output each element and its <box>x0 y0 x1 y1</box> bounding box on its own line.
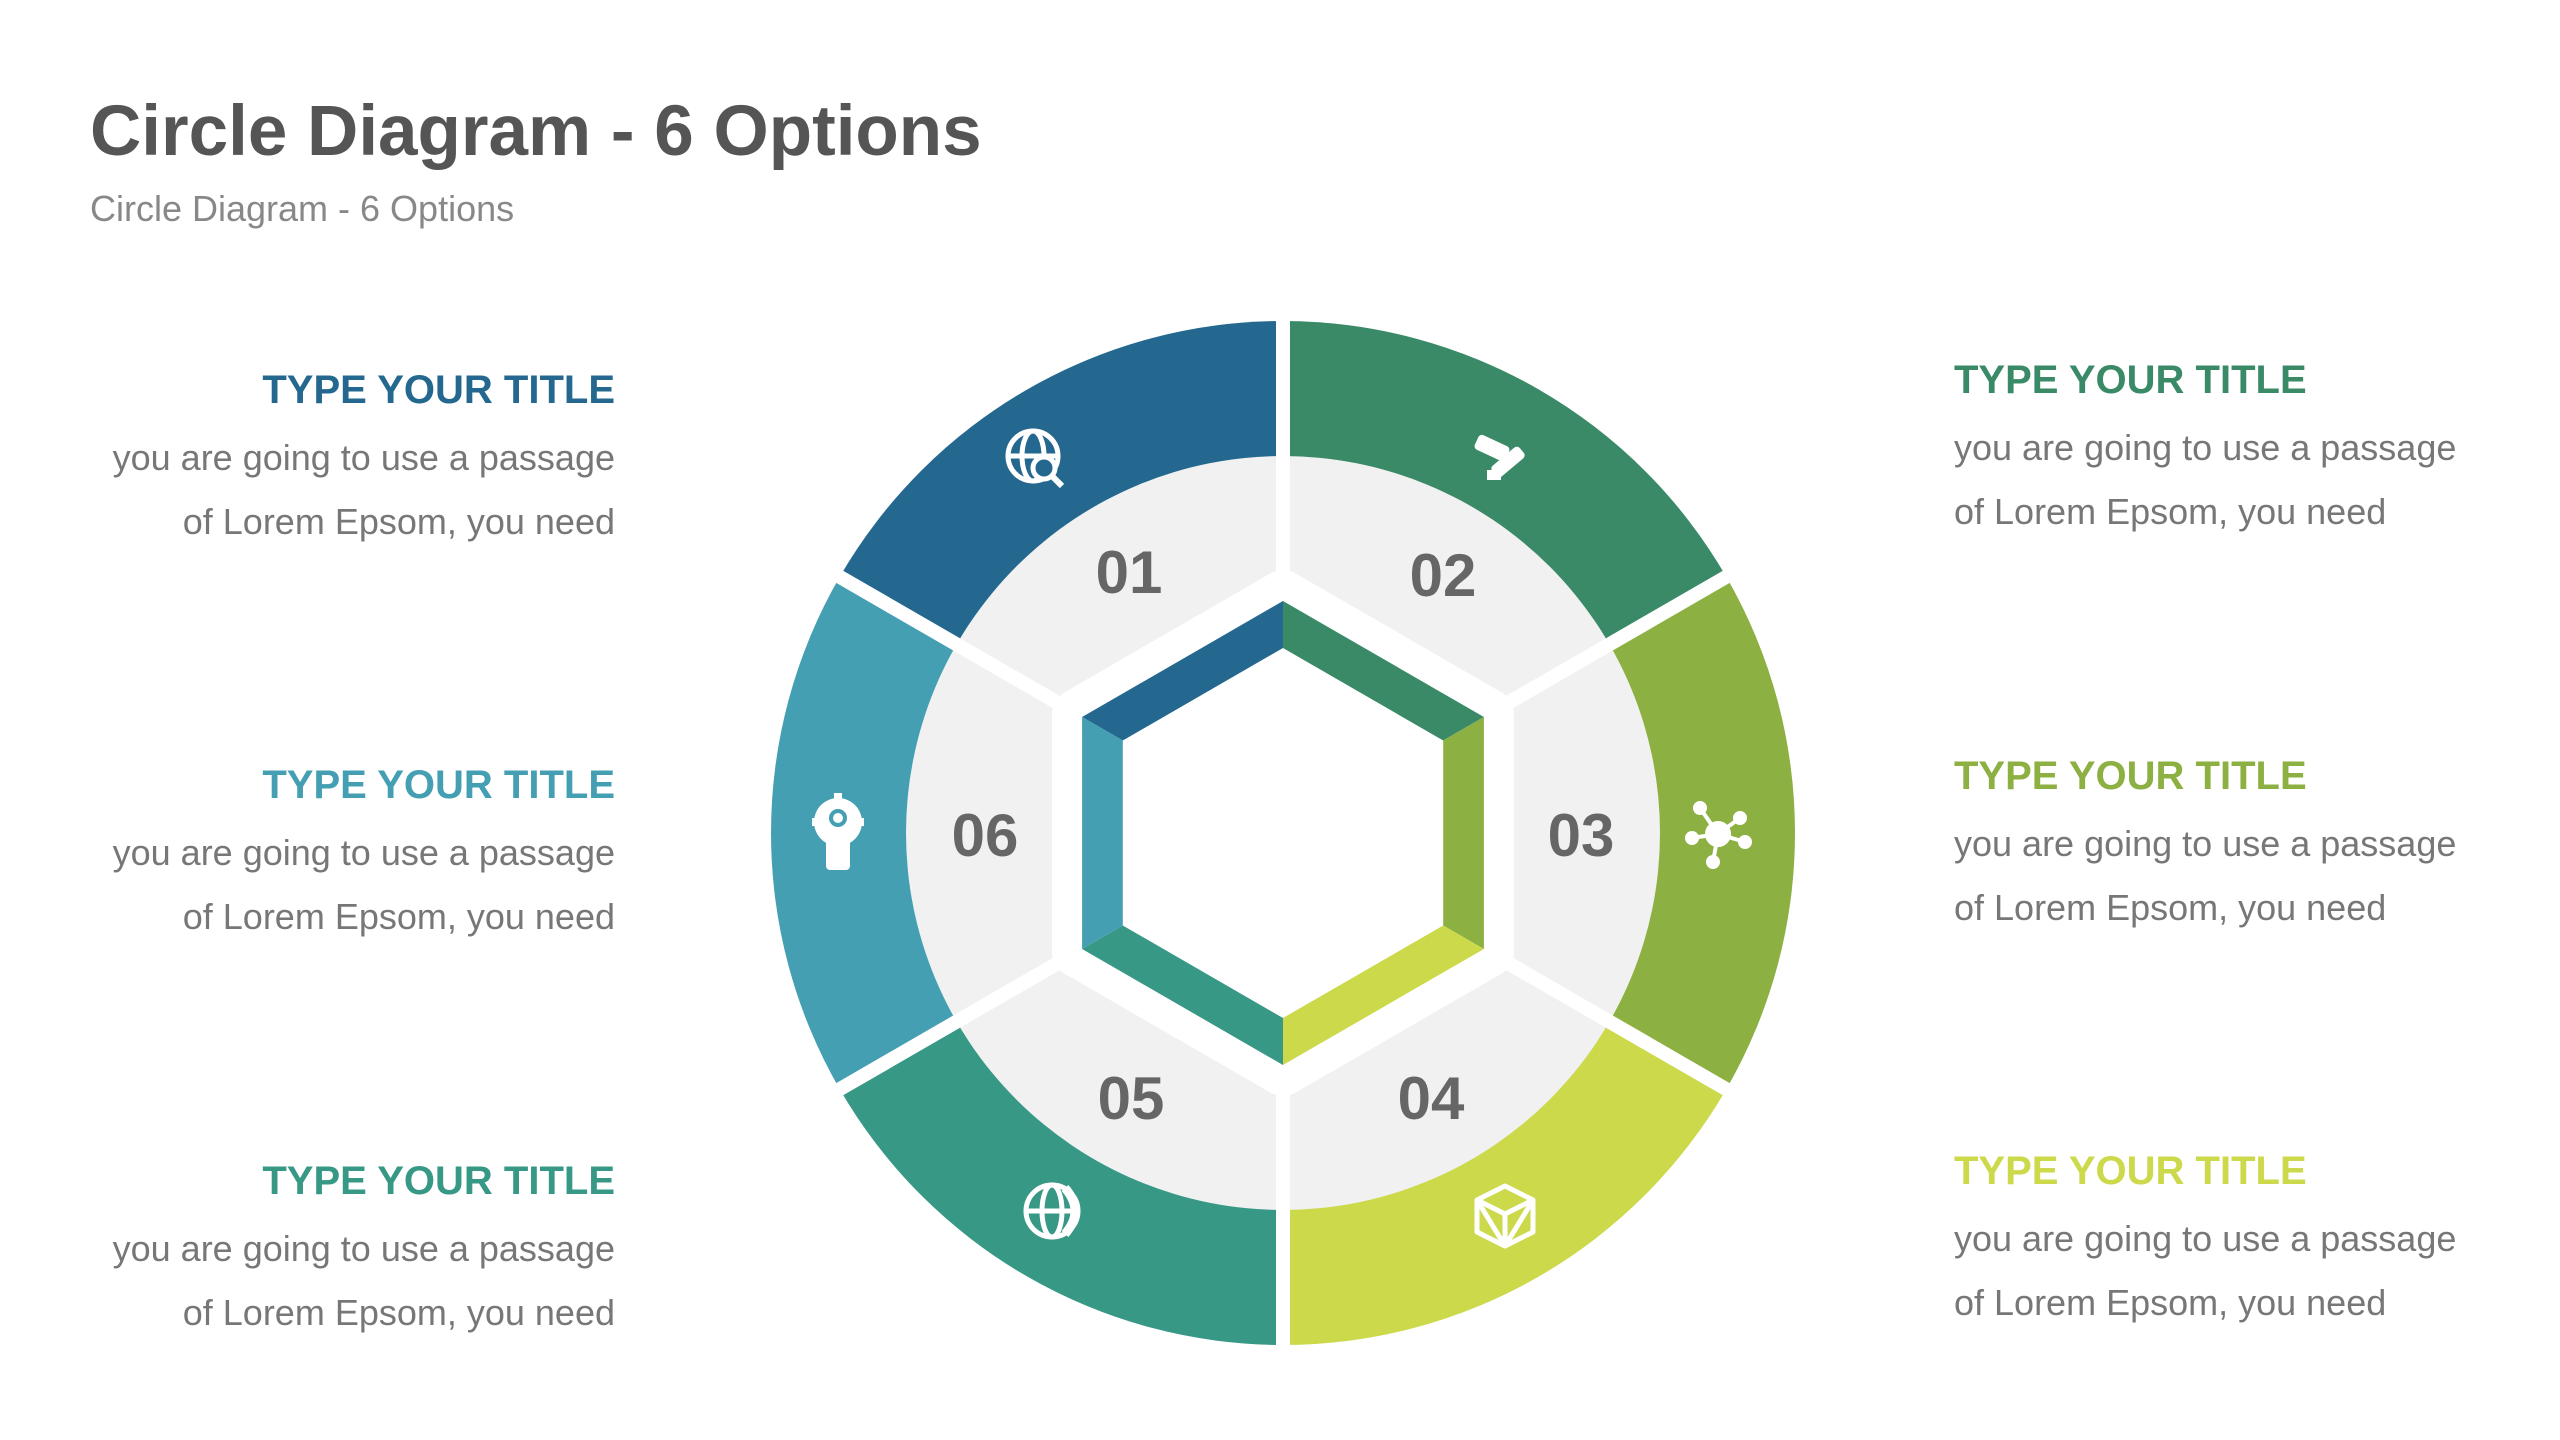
text block 06: TYPE YOUR TITLE <box>262 763 615 807</box>
segment 03 <box>1283 577 1795 1089</box>
text block 05 <box>113 1159 615 1333</box>
numbers <box>952 539 1614 1132</box>
icon: handshake <box>1473 434 1526 480</box>
text block 05: TYPE YOUR TITLE <box>262 1159 615 1203</box>
gray ring <box>906 456 1660 1210</box>
text block 02: of Lorem Epsom, you need <box>1954 491 2386 532</box>
numbers: 04 <box>1398 1065 1465 1132</box>
text block 04: you are going to use a passage <box>1954 1218 2456 1259</box>
text block 05: of Lorem Epsom, you need <box>183 1292 615 1333</box>
circle diagram <box>771 300 1795 1366</box>
segment 06 <box>771 577 1283 1089</box>
hex ring <box>1082 601 1484 1065</box>
text block 03: you are going to use a passage <box>1954 823 2456 864</box>
text block 06 <box>113 763 615 937</box>
text block 01: you are going to use a passage <box>113 437 615 478</box>
text block 04: TYPE YOUR TITLE <box>1954 1149 2307 1193</box>
text block 02: you are going to use a passage <box>1954 427 2456 468</box>
numbers: 06 <box>952 802 1018 869</box>
numbers: 03 <box>1548 802 1614 869</box>
text block 02 <box>1954 358 2456 532</box>
subtitle: Circle Diagram - 6 Options <box>90 188 514 229</box>
numbers: 01 <box>1096 539 1162 606</box>
numbers: 05 <box>1098 1065 1164 1132</box>
text block 04 <box>1954 1149 2456 1323</box>
icon: gear person <box>812 793 864 870</box>
text block 01 <box>113 368 615 542</box>
numbers: 02 <box>1410 542 1476 609</box>
text block 06: of Lorem Epsom, you need <box>183 896 615 937</box>
text block 03: of Lorem Epsom, you need <box>1954 887 2386 928</box>
segment 05 <box>840 833 1283 1345</box>
text block 03 <box>1954 754 2456 928</box>
icon: globe search <box>1008 431 1062 486</box>
text block 05: you are going to use a passage <box>113 1228 615 1269</box>
text block 03: TYPE YOUR TITLE <box>1954 754 2307 798</box>
title: Circle Diagram - 6 Options <box>90 92 982 171</box>
text block 01: TYPE YOUR TITLE <box>262 368 615 412</box>
segment 01 <box>840 321 1283 833</box>
icon: globe phone <box>1026 1185 1078 1237</box>
segment 04 <box>1283 833 1726 1345</box>
text block 06: you are going to use a passage <box>113 832 615 873</box>
icon: box <box>1477 1186 1533 1246</box>
text block 04: of Lorem Epsom, you need <box>1954 1282 2386 1323</box>
text block 02: TYPE YOUR TITLE <box>1954 358 2307 402</box>
text block 01: of Lorem Epsom, you need <box>183 501 615 542</box>
icon: network <box>1687 803 1750 867</box>
segment 02 <box>1283 321 1726 833</box>
